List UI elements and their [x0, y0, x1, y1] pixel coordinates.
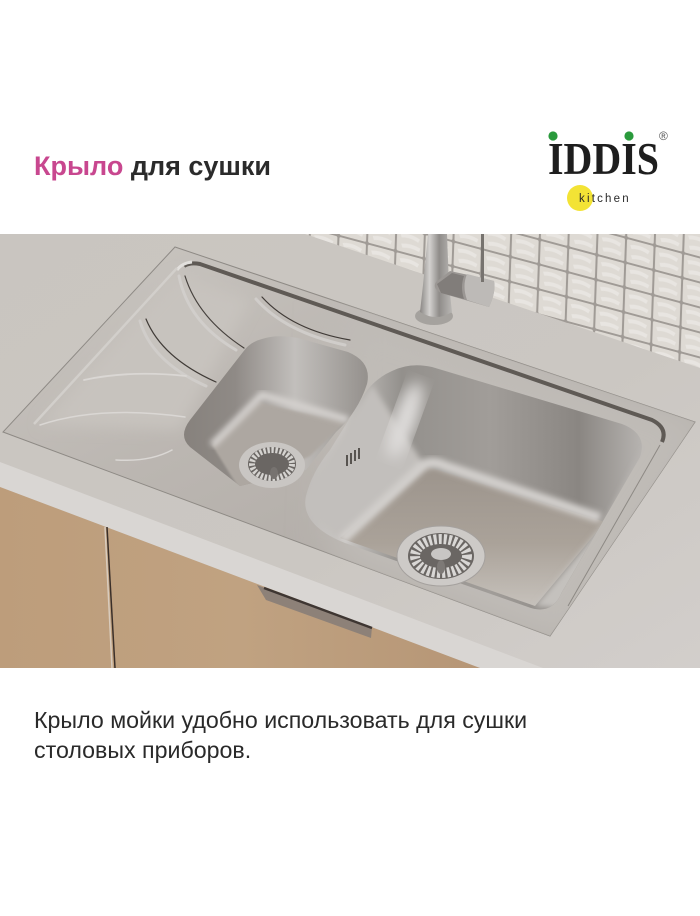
logo green dot right — [624, 131, 634, 141]
rim highlight — [177, 262, 192, 270]
large basin — [306, 365, 642, 610]
large basin front lip — [342, 463, 600, 540]
small basin floor — [212, 407, 324, 486]
wood cabinets — [0, 487, 480, 668]
large basin left wall — [340, 388, 422, 538]
small basin — [184, 336, 368, 486]
large basin floor — [340, 480, 602, 606]
body text: Крыло мойки удобно использовать для сушки — [34, 707, 527, 733]
logo: IDDIS kitchen — [548, 129, 668, 211]
sink plate — [3, 247, 695, 636]
large basin right wall — [536, 492, 620, 609]
logo wordmark: IDDIS — [548, 133, 659, 184]
wall tiles — [305, 234, 700, 368]
logo green dot left — [548, 131, 558, 141]
logo yellow circle — [567, 185, 593, 211]
photo: stainless steel sink in countertop — [0, 234, 700, 668]
overflow slots — [347, 448, 359, 466]
large basin wall sheen — [384, 377, 430, 458]
body text: столовых приборов. — [34, 737, 251, 763]
faucet spout — [481, 234, 484, 282]
handle — [257, 585, 372, 638]
cabinet gap — [107, 527, 115, 668]
small drain — [239, 442, 305, 488]
rim dark channel — [184, 263, 664, 442]
countertop — [0, 234, 700, 668]
faucet lever — [435, 271, 494, 307]
countertop front edge — [0, 462, 543, 668]
title: Крыло для сушки — [34, 151, 271, 181]
wing grooves — [40, 276, 350, 460]
logo registered mark: ® — [659, 129, 668, 143]
large drain — [397, 526, 485, 586]
faucet — [415, 234, 494, 325]
logo kitchen word: kitchen — [579, 193, 631, 205]
body text — [34, 707, 527, 763]
plate soft shading — [76, 282, 695, 636]
